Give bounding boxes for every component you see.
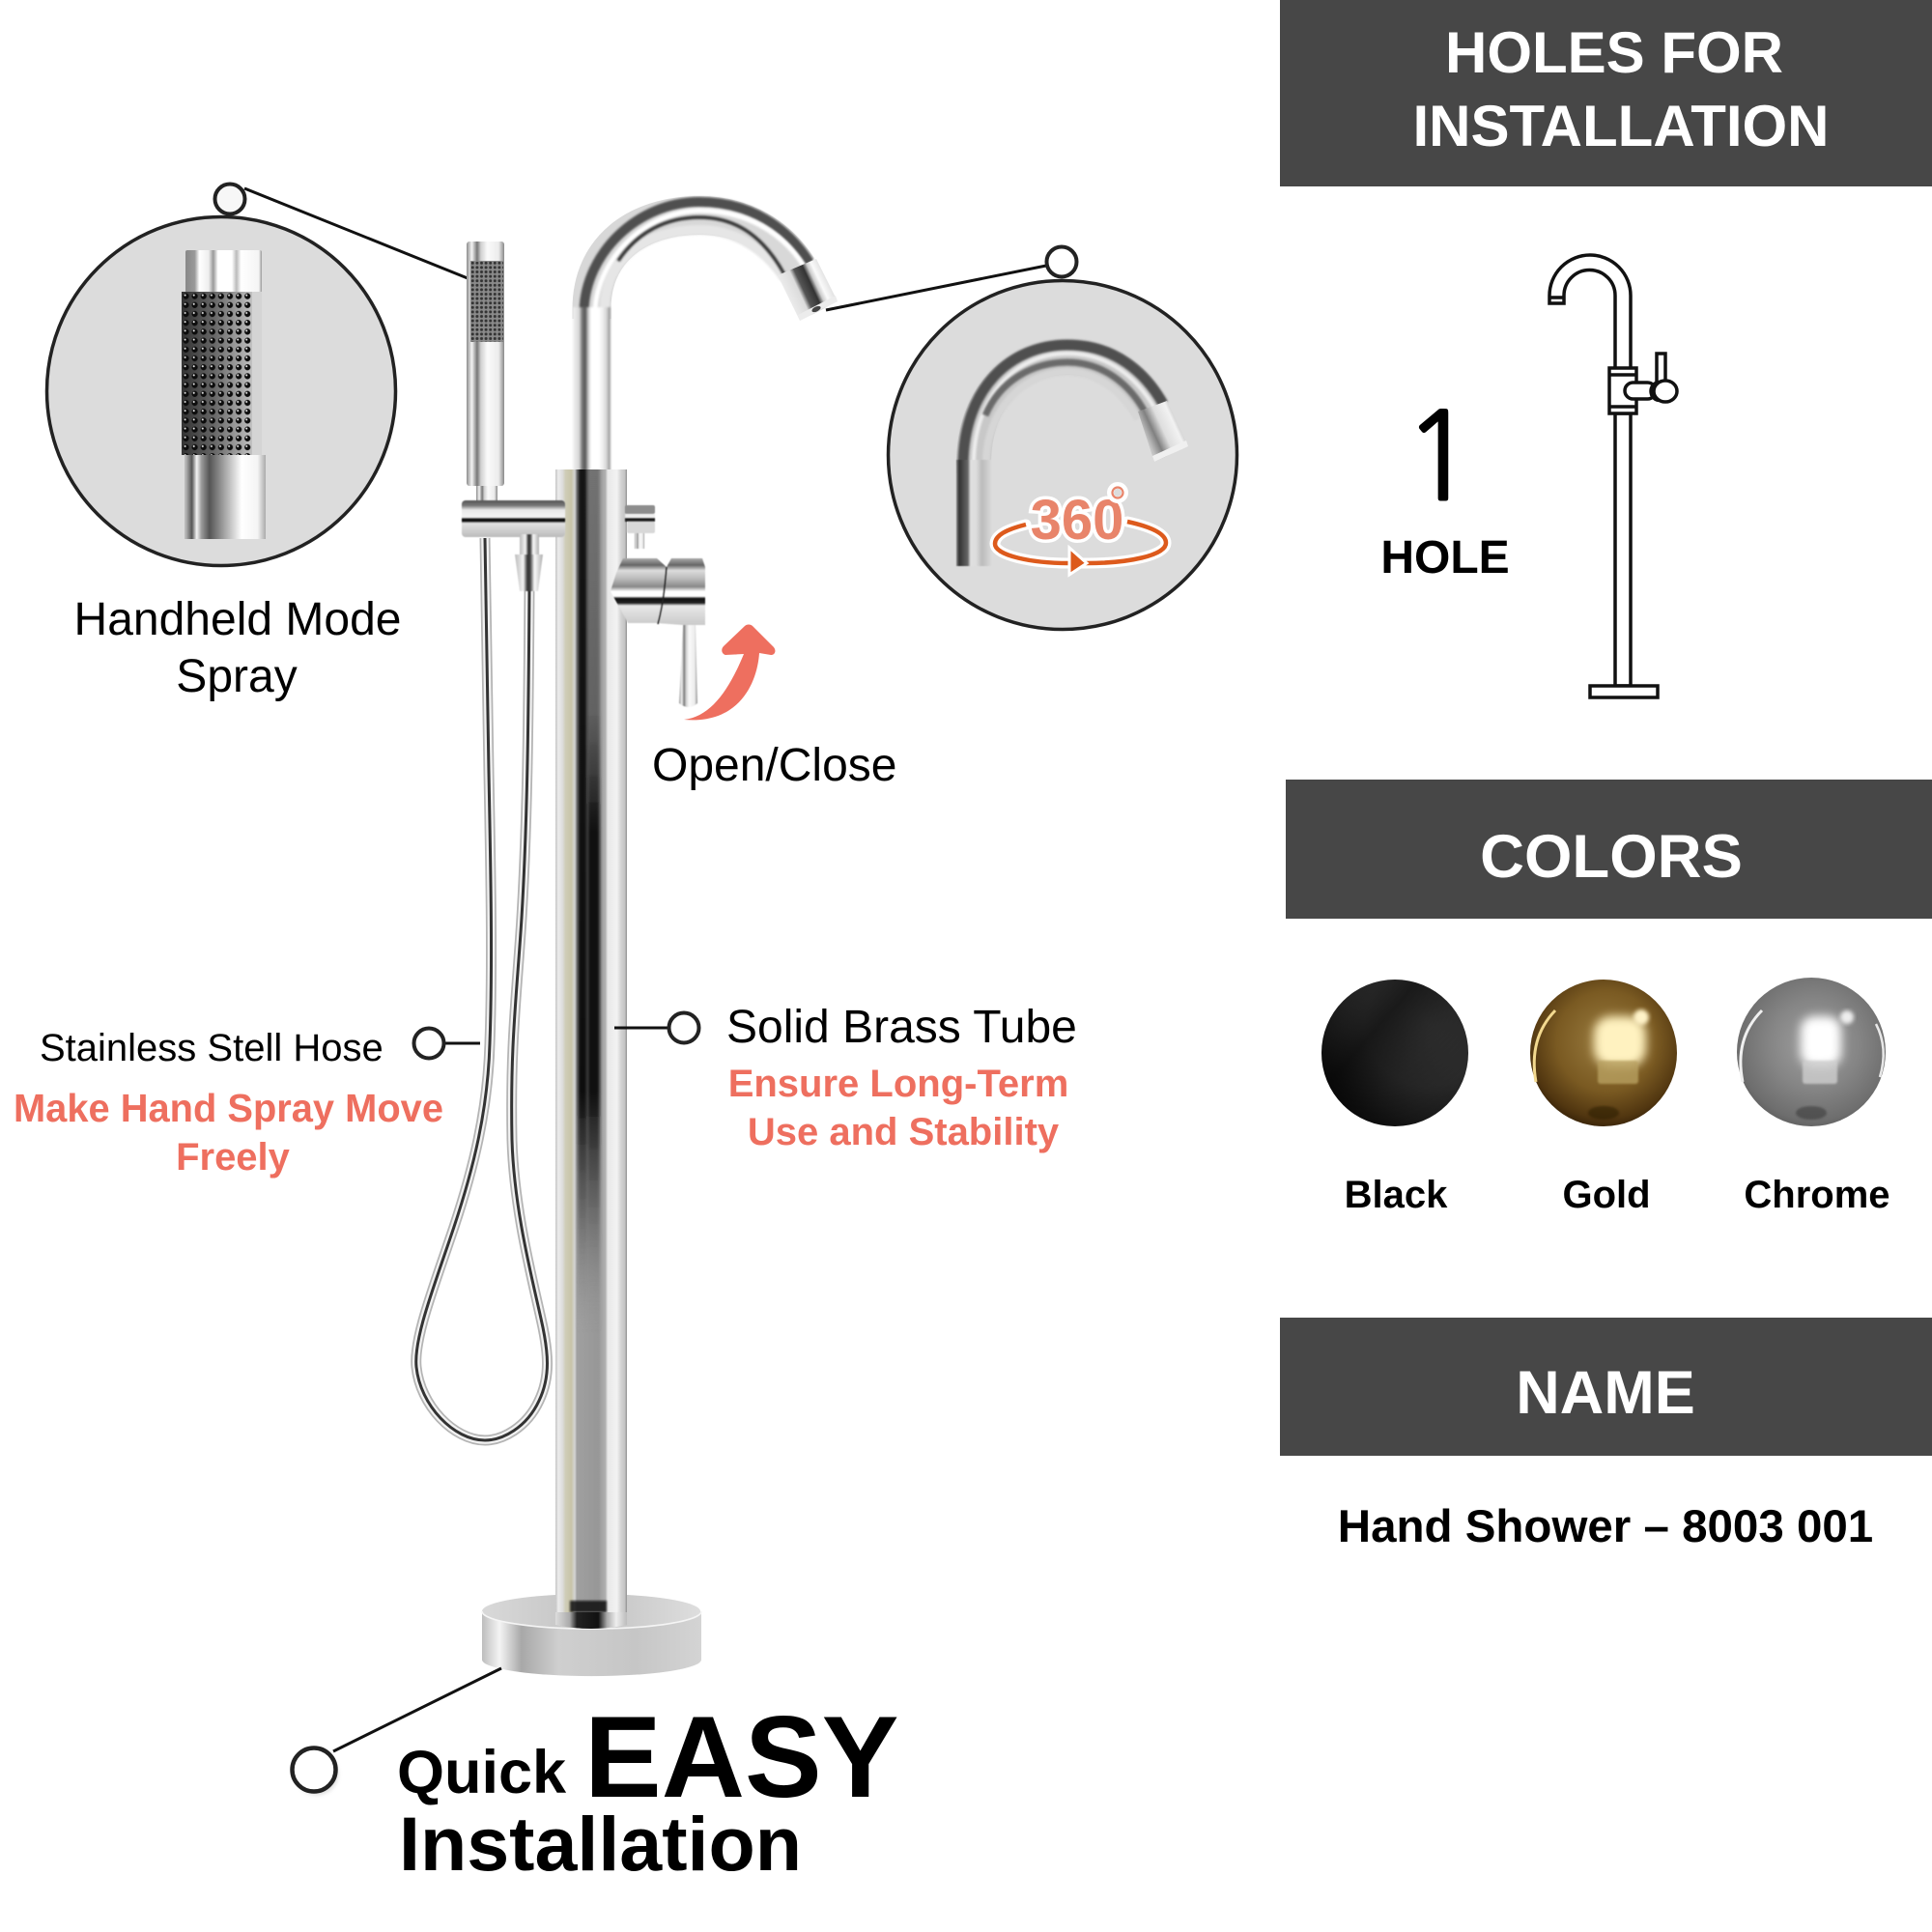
marker: spout ring and leader line [826,247,1076,310]
panel: handheld spray zoom circle [46,216,396,566]
heading bar: name [1280,1318,1932,1456]
text: open close: Open/Close [652,740,896,791]
side bracket [625,505,655,549]
illustration: freestanding chrome faucet [416,202,838,1676]
text: handheld mode spray: Spray [176,651,298,702]
text: handheld mode spray [74,594,401,702]
heading bar: name: NAME [1516,1359,1695,1427]
spout close-up [956,345,1188,566]
text: quick easy installation: Quick [397,1739,567,1806]
color labels [1345,1174,1890,1216]
text: 1 hole: 1 [1403,396,1476,517]
text: 1 hole [1380,396,1510,583]
text: stainless steel hose callout [14,1027,443,1179]
text: product name: Hand Shower – 8003 001 [1338,1501,1873,1552]
360 degree rotation badge: 360 [1031,489,1123,552]
swatch: chrome [1737,978,1886,1126]
swatch: gold [1530,980,1677,1126]
marker: handheld ring and leader line [214,184,468,278]
text: quick easy installation [397,1693,898,1887]
color labels: Chrome [1744,1174,1890,1216]
heading bar: colors: COLORS [1480,823,1743,891]
360 degree rotation badge [995,485,1166,575]
hose [416,538,547,1440]
handheld shower head close-up [182,250,266,539]
heading bar: holes for installation: INSTALLATION [1412,94,1830,158]
text: 1 hole: HOLE [1380,532,1510,583]
heading bar: holes for installation [1280,0,1932,186]
text: stainless steel hose callout: Freely [176,1136,291,1179]
text: solid brass tube callout: Solid Brass Tube [726,1002,1077,1053]
swatch: black [1321,980,1468,1126]
color labels: Black [1345,1174,1448,1216]
text: quick easy installation: Installation [399,1801,802,1887]
marker: hose ring and leader line [413,1028,480,1059]
text: stainless steel hose callout: Make Hand Spray Move [14,1086,443,1130]
shower head [467,242,504,503]
color labels: Gold [1562,1174,1651,1216]
heading bar: holes for installation: HOLES FOR [1445,20,1783,85]
nozzle [778,259,838,321]
wall holder [462,500,565,591]
lever mixer [611,558,705,707]
marker: base ring and leader line [292,1668,501,1795]
base plate [482,1584,701,1676]
text: stainless steel hose callout: Stainless Stell Hose [40,1027,384,1069]
upper spout [583,202,810,319]
text: handheld mode spray: Handheld Mode [74,594,401,645]
icon: faucet outline [1549,255,1677,697]
arrow: open close direction [684,624,775,720]
text: solid brass tube callout: Ensure Long-Term [728,1063,1068,1105]
panel: 360 spout zoom circle [889,280,1236,630]
marker: brass tube ring and leader line [614,1012,699,1043]
text: solid brass tube callout [726,1002,1077,1153]
main tube [555,469,627,1619]
text: solid brass tube callout: Use and Stability [748,1111,1060,1153]
text: quick easy installation: EASY [584,1693,898,1822]
heading bar: colors [1286,780,1932,919]
